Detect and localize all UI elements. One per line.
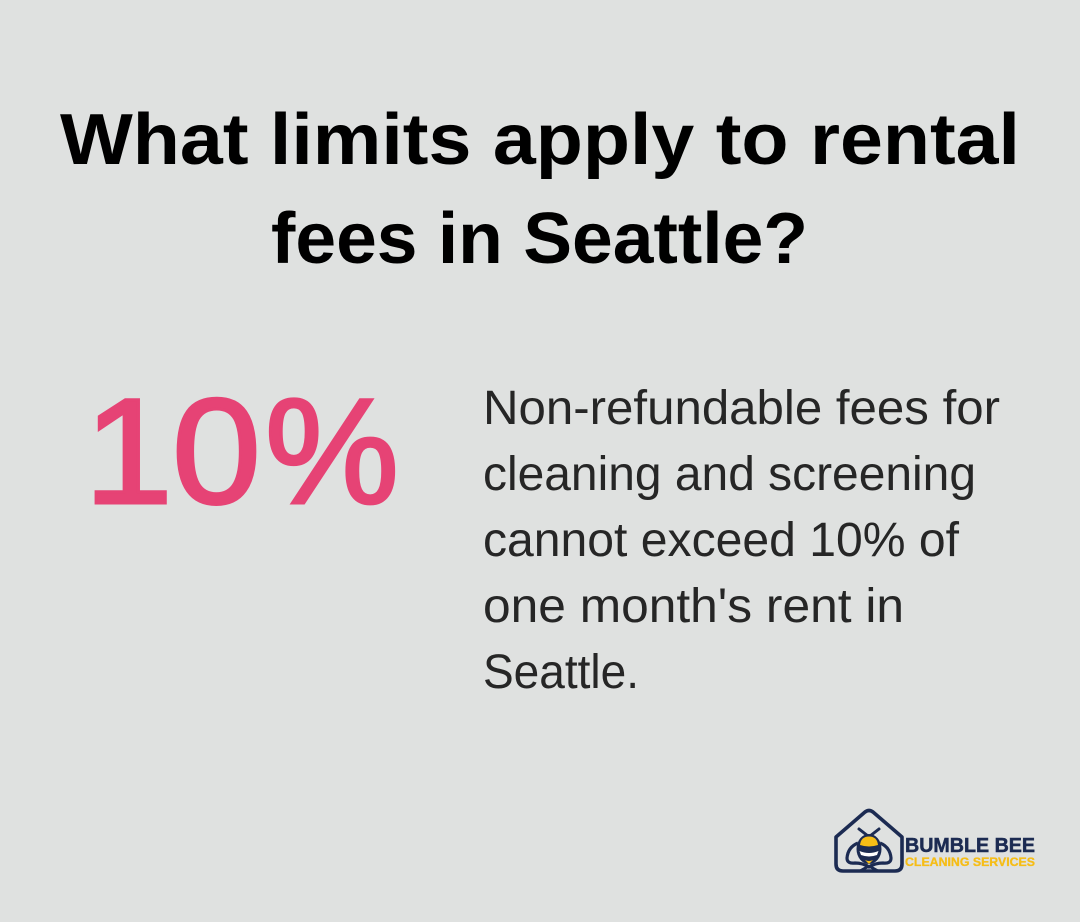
logo: Bumble Bee Cleaning Services [836, 810, 1035, 871]
icon: house outline with bee [836, 810, 902, 871]
title [60, 100, 1020, 279]
description text [483, 382, 1000, 699]
description text: cannot exceed 10% of [483, 514, 960, 567]
description text: one month's rent in [483, 580, 904, 633]
title: What limits apply to rental [60, 100, 1020, 180]
description text: cleaning and screening [483, 448, 976, 501]
description text: Non-refundable fees for [483, 382, 1000, 435]
logo tagline: CLEANING SERVICES [905, 855, 1035, 869]
big stat: 10% [84, 367, 399, 535]
logo wordmark: BUMBLE BEE [905, 835, 1035, 857]
description text: Seattle. [483, 646, 639, 699]
title: fees in Seattle? [271, 199, 808, 279]
big stat: 10%: % [265, 367, 399, 535]
big stat: 10%: 1 [84, 367, 173, 535]
big stat: 10%: 0 [172, 367, 261, 535]
